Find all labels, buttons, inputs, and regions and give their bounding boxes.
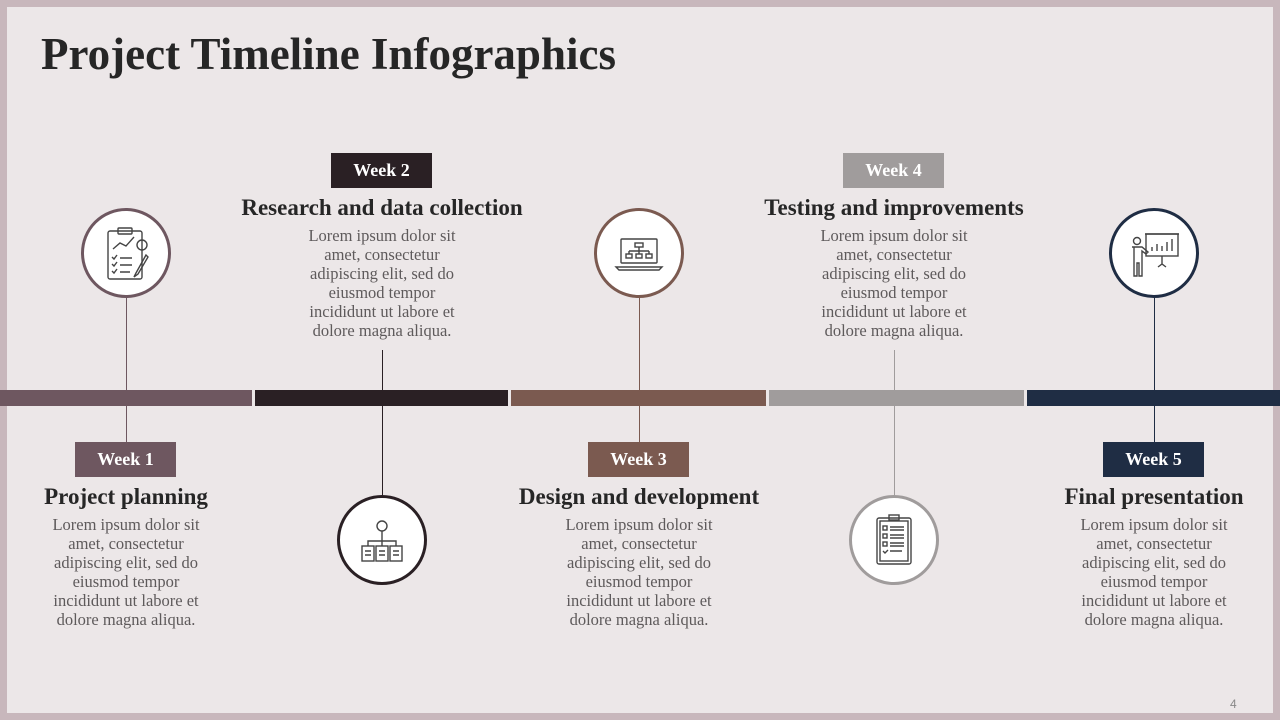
text: adipiscing elit, sed do bbox=[1082, 553, 1226, 572]
text: amet, consectetur bbox=[68, 534, 184, 553]
label: week 3: Week 3 bbox=[610, 449, 667, 469]
icon: laptop bbox=[594, 208, 684, 298]
text: Lorem ipsum dolor sit bbox=[1080, 515, 1228, 534]
text: incididunt ut labore et bbox=[309, 302, 455, 321]
label: week 4: Week 4 bbox=[865, 160, 922, 180]
text: adipiscing elit, sed do bbox=[54, 553, 198, 572]
page number: 4 bbox=[1230, 697, 1237, 711]
label: week 2 bbox=[331, 153, 432, 188]
step 2 bbox=[241, 153, 523, 585]
text bbox=[52, 515, 200, 629]
text: adipiscing elit, sed do bbox=[822, 264, 966, 283]
text: Lorem ipsum dolor sit bbox=[820, 226, 968, 245]
icon: checklist clipboard bbox=[849, 495, 939, 585]
text: dolore magna aliqua. bbox=[570, 610, 708, 629]
label: week 5 bbox=[1103, 442, 1204, 477]
text: eiusmod tempor bbox=[73, 572, 179, 591]
text: dolore magna aliqua. bbox=[313, 321, 451, 340]
text: amet, consectetur bbox=[836, 245, 952, 264]
icon: clipboard with gear bbox=[81, 208, 171, 298]
text: amet, consectetur bbox=[581, 534, 697, 553]
text: amet, consectetur bbox=[324, 245, 440, 264]
text: Lorem ipsum dolor sit bbox=[565, 515, 713, 534]
text: eiusmod tempor bbox=[841, 283, 947, 302]
heading: Project planning bbox=[44, 484, 208, 509]
text: dolore magna aliqua. bbox=[1085, 610, 1223, 629]
label: week 2: Week 2 bbox=[353, 160, 410, 180]
step 5 bbox=[1064, 208, 1244, 629]
text: incididunt ut labore et bbox=[53, 591, 199, 610]
step 1 bbox=[44, 208, 208, 629]
text: Lorem ipsum dolor sit bbox=[52, 515, 200, 534]
heading: Testing and improvements bbox=[764, 195, 1024, 220]
text: dolore magna aliqua. bbox=[57, 610, 195, 629]
step 3 bbox=[519, 208, 760, 629]
step 4 bbox=[764, 153, 1024, 585]
icon: presenter with chart bbox=[1109, 208, 1199, 298]
text: incididunt ut labore et bbox=[821, 302, 967, 321]
text bbox=[565, 515, 713, 629]
heading: Research and data collection bbox=[241, 195, 523, 220]
text: eiusmod tempor bbox=[329, 283, 435, 302]
text: amet, consectetur bbox=[1096, 534, 1212, 553]
text: eiusmod tempor bbox=[1101, 572, 1207, 591]
text: incididunt ut labore et bbox=[566, 591, 712, 610]
label: week 4 bbox=[843, 153, 944, 188]
title: Project Timeline Infographics bbox=[41, 29, 616, 79]
label: week 1: Week 1 bbox=[97, 449, 154, 469]
text bbox=[820, 226, 968, 340]
label: week 3 bbox=[588, 442, 689, 477]
timeline bar bbox=[0, 390, 1280, 406]
text: incididunt ut labore et bbox=[1081, 591, 1227, 610]
text: eiusmod tempor bbox=[586, 572, 692, 591]
label: week 5: Week 5 bbox=[1125, 449, 1182, 469]
text: dolore magna aliqua. bbox=[825, 321, 963, 340]
text: Lorem ipsum dolor sit bbox=[308, 226, 456, 245]
heading: Final presentation bbox=[1064, 484, 1244, 509]
connector lines bbox=[126, 297, 127, 442]
icon: search hierarchy bbox=[337, 495, 427, 585]
label: week 1 bbox=[75, 442, 176, 477]
text: adipiscing elit, sed do bbox=[310, 264, 454, 283]
text bbox=[1080, 515, 1228, 629]
heading: Design and development bbox=[519, 484, 759, 509]
text: adipiscing elit, sed do bbox=[567, 553, 711, 572]
text bbox=[308, 226, 456, 340]
